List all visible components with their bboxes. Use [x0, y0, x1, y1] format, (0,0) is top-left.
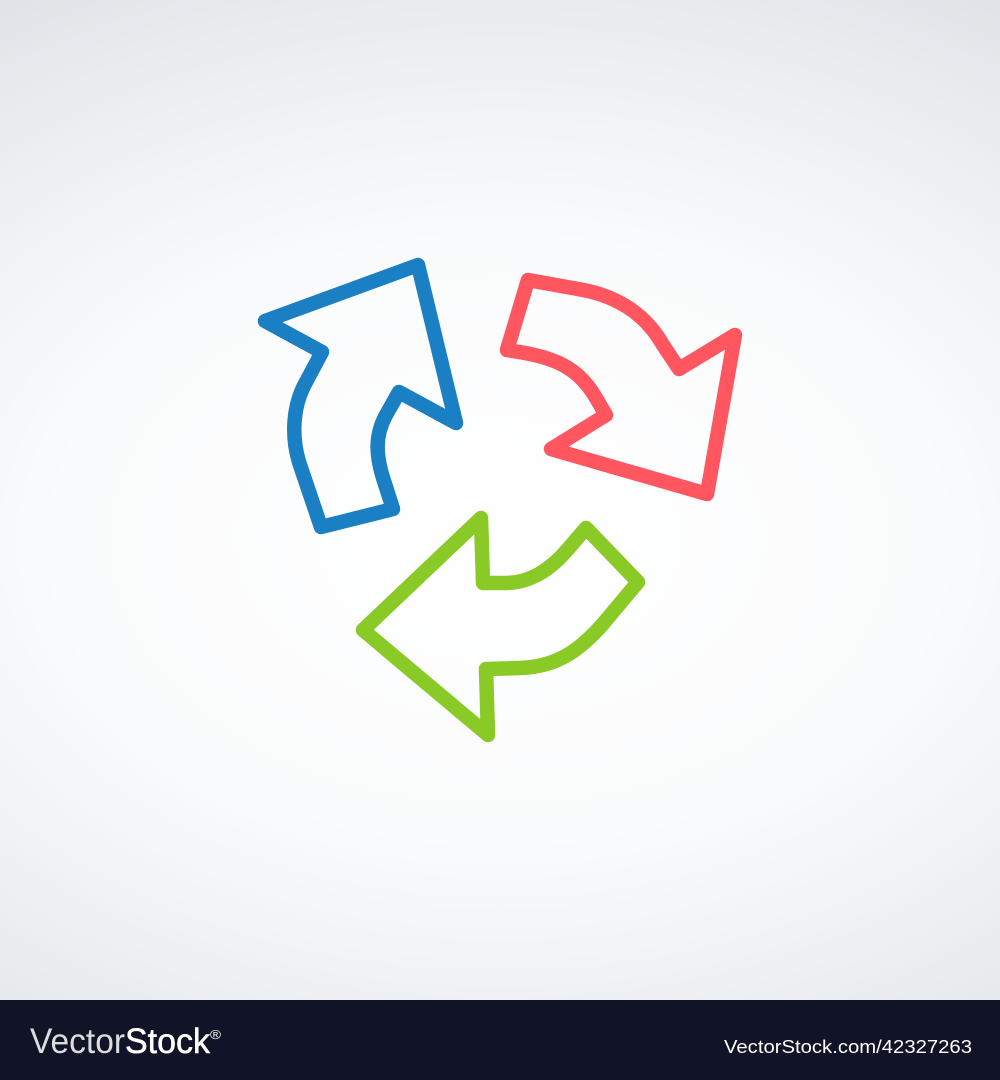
- arrow: blue, pointing up: [265, 265, 456, 527]
- footer image id: VectorStock.com/42327263: [724, 1036, 972, 1057]
- logo text: Vector: Vector: [30, 1022, 125, 1061]
- arrow: green, pointing left: [363, 518, 638, 735]
- footer bar: [0, 1000, 1000, 1080]
- logo registered mark: ®: [210, 1027, 221, 1042]
- icon: three cycling arrows: [265, 265, 735, 735]
- footer logo: [30, 1022, 221, 1061]
- arrow: red, pointing down-right: [507, 280, 735, 494]
- logo text: Stock: Stock: [125, 1022, 210, 1061]
